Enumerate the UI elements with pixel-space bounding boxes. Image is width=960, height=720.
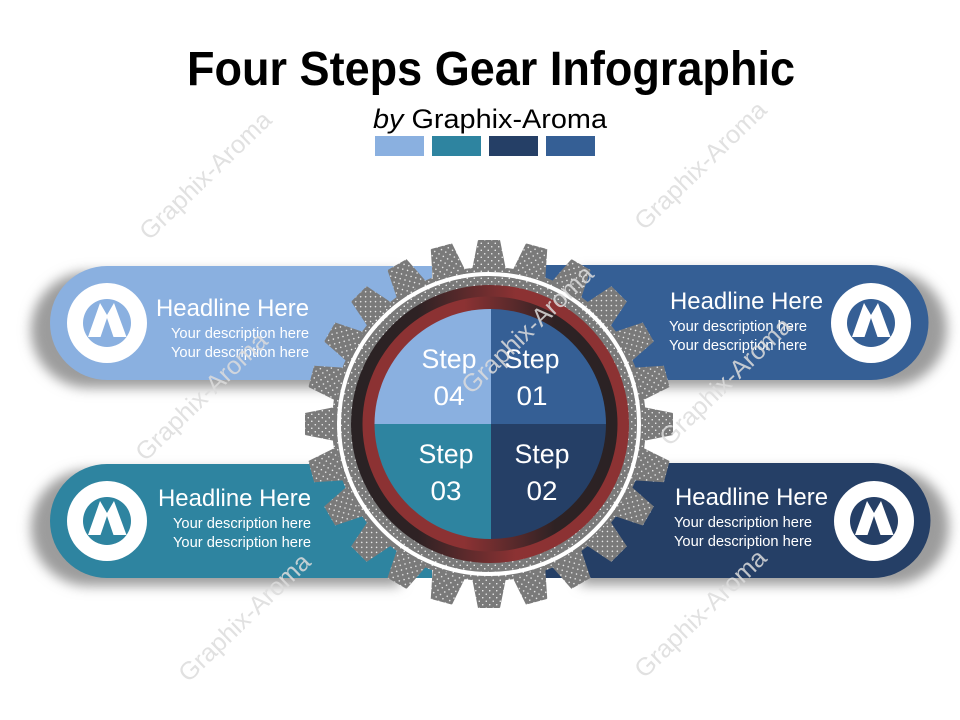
step 03 quadrant: [374, 424, 491, 539]
panel: headline top right: [545, 265, 947, 387]
panel: headline bottom right: [545, 463, 949, 585]
step 04 quadrant: [374, 309, 491, 424]
step 04 quadrant: 04: [434, 381, 464, 411]
panel: headline bottom left: Headline Here: [158, 485, 311, 512]
panel: headline top left: [31, 266, 432, 388]
watermarks: Graphix-Aroma: [130, 327, 273, 467]
watermarks: Graphix-Aroma: [456, 260, 599, 400]
subtitle: by Graphix-Aroma: [373, 104, 608, 134]
panel: headline bottom left: Your description here: [173, 516, 311, 532]
gear: [305, 240, 673, 608]
panel: headline top right: Your description here: [669, 338, 807, 354]
watermarks: Graphix-Aroma: [173, 548, 316, 688]
title: Four Steps Gear Infographic: [187, 43, 795, 96]
watermarks: Graphix-Aroma: [629, 96, 772, 236]
panel: headline top left: Headline Here: [156, 295, 309, 322]
panel: headline top right: Headline Here: [670, 288, 823, 315]
panel: headline bottom right: Your description here: [674, 515, 812, 531]
watermarks: [130, 96, 797, 688]
step 01 quadrant: [491, 309, 606, 424]
step 04 quadrant: Step: [422, 344, 476, 374]
step 02 quadrant: Step: [514, 439, 570, 469]
step 02 quadrant: 02: [526, 476, 558, 506]
step 03 quadrant: 03: [430, 476, 462, 506]
step 01 quadrant: 01: [516, 381, 548, 411]
watermarks: Graphix-Aroma: [629, 544, 772, 684]
panel: headline top right: Your description here: [669, 319, 807, 335]
watermarks: Graphix-Aroma: [654, 312, 797, 452]
colour swatches: [375, 136, 595, 156]
panel: headline bottom right: Your description here: [674, 534, 812, 550]
panel: headline top left: Your description here: [171, 326, 309, 342]
step 01 quadrant: Step: [504, 344, 560, 374]
panel: headline top left: Your description here: [171, 345, 309, 361]
step 02 quadrant: [491, 424, 606, 539]
panel: headline bottom left: [31, 464, 432, 586]
watermarks: Graphix-Aroma: [134, 106, 277, 246]
step 03 quadrant: Step: [418, 439, 474, 469]
step circle: [374, 309, 606, 539]
panel: headline bottom right: Headline Here: [675, 484, 828, 511]
panel: headline bottom left: Your description here: [173, 535, 311, 551]
